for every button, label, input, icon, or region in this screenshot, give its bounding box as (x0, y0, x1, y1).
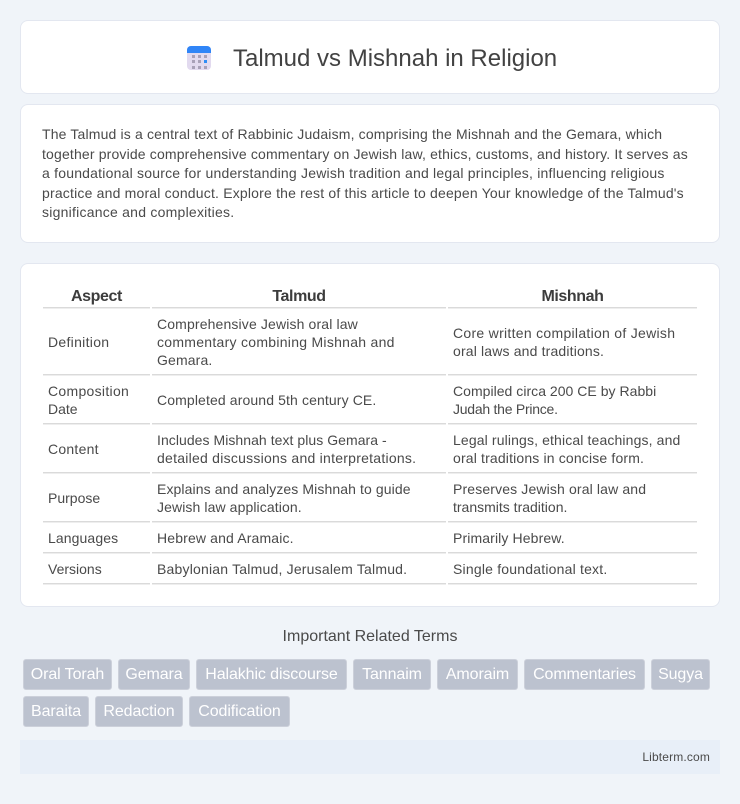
row: languages: Languages (48, 530, 118, 546)
row: definition: Gemara. (157, 352, 212, 368)
tag cloud: related terms: Commentaries (533, 666, 636, 683)
panel: introduction (20, 104, 720, 243)
row: languages: Hebrew and Aramaic. (157, 530, 294, 546)
row: purpose: Preserves Jewish oral law and (453, 481, 646, 497)
row: languages: Primarily Hebrew. (453, 530, 565, 546)
row: versions: Single foundational text. (453, 561, 607, 577)
row: definition: Core written compilation of Jewish (453, 325, 675, 341)
row: versions (48, 561, 607, 577)
table header (71, 288, 604, 305)
tag cloud: related terms: Sugya (658, 666, 703, 683)
table header: Aspect (71, 288, 122, 305)
footer credit: Libterm.com (642, 750, 710, 764)
row: languages (48, 530, 565, 546)
row: definition (48, 316, 675, 368)
row: purpose: Explains and analyzes Mishnah to guide (157, 481, 411, 497)
row: content: oral traditions in concise form. (453, 450, 644, 466)
table header: Talmud (272, 288, 326, 305)
title: Talmud vs Mishnah in Religion (233, 45, 557, 72)
row: composition date: Compiled circa 200 CE by Rabbi (453, 383, 656, 399)
tag cloud: related terms: Tannaim (362, 666, 422, 683)
tag cloud: related terms (23, 659, 710, 727)
row: purpose: transmits tradition. (453, 499, 567, 515)
row: definition: oral laws and traditions. (453, 343, 604, 359)
row: composition date: Completed around 5th century CE. (157, 392, 376, 408)
tag cloud: related terms: Redaction (103, 703, 175, 720)
row: versions: Babylonian Talmud, Jerusalem Talmud. (157, 561, 407, 577)
row: definition: Definition (48, 334, 109, 350)
tag cloud: related terms: Oral Torah (31, 666, 104, 683)
table header: Mishnah (541, 288, 604, 305)
heading: important related terms: Important Related Terms (283, 628, 457, 645)
row: content: Includes Mishnah text plus Gemara - (157, 432, 387, 448)
row: content (48, 432, 680, 466)
row: composition date (48, 383, 656, 417)
row: content: Legal rulings, ethical teachings, and (453, 432, 680, 448)
text block: introduction: a foundational source for understanding Jewish tradition and legal principles, influencing religious (42, 165, 665, 181)
text block: introduction: practice and moral conduct. Explore the rest of this article to deepen Your knowledge of the Talmud's (42, 185, 684, 201)
row: purpose: Purpose (48, 490, 100, 506)
row: definition: commentary combining Mishnah and (157, 334, 395, 350)
row: content: Content (48, 441, 99, 457)
row: composition date: Judah the Prince. (453, 401, 558, 417)
tag cloud: related terms: Baraita (31, 703, 81, 720)
row: composition date: Date (48, 401, 78, 417)
row: purpose (48, 481, 646, 515)
tag cloud: related terms: Amoraim (446, 666, 509, 683)
row: content: detailed discussions and interpretations. (157, 450, 416, 466)
footer (20, 740, 720, 774)
row: definition: Comprehensive Jewish oral law (157, 316, 358, 332)
panel: header (20, 20, 720, 94)
row: composition date: Composition (48, 383, 129, 399)
tag cloud: related terms: Halakhic discourse (205, 666, 338, 683)
text block: introduction (42, 126, 688, 220)
text block: introduction: together provide comprehensive commentary on Jewish law, ethics, customs, and history. It serves as (42, 146, 688, 162)
row: purpose: Jewish law application. (157, 499, 302, 515)
text block: introduction: The Talmud is a central text of Rabbinic Judaism, comprising the Mishnah and the Gemara, which (42, 126, 662, 142)
tag cloud: related terms: Codification (198, 703, 281, 720)
row: versions: Versions (48, 561, 102, 577)
text block: introduction: significance and complexities. (42, 204, 234, 220)
icon: calendar (187, 46, 211, 70)
tag cloud: related terms: Gemara (125, 666, 183, 683)
panel: comparison table (20, 263, 720, 607)
